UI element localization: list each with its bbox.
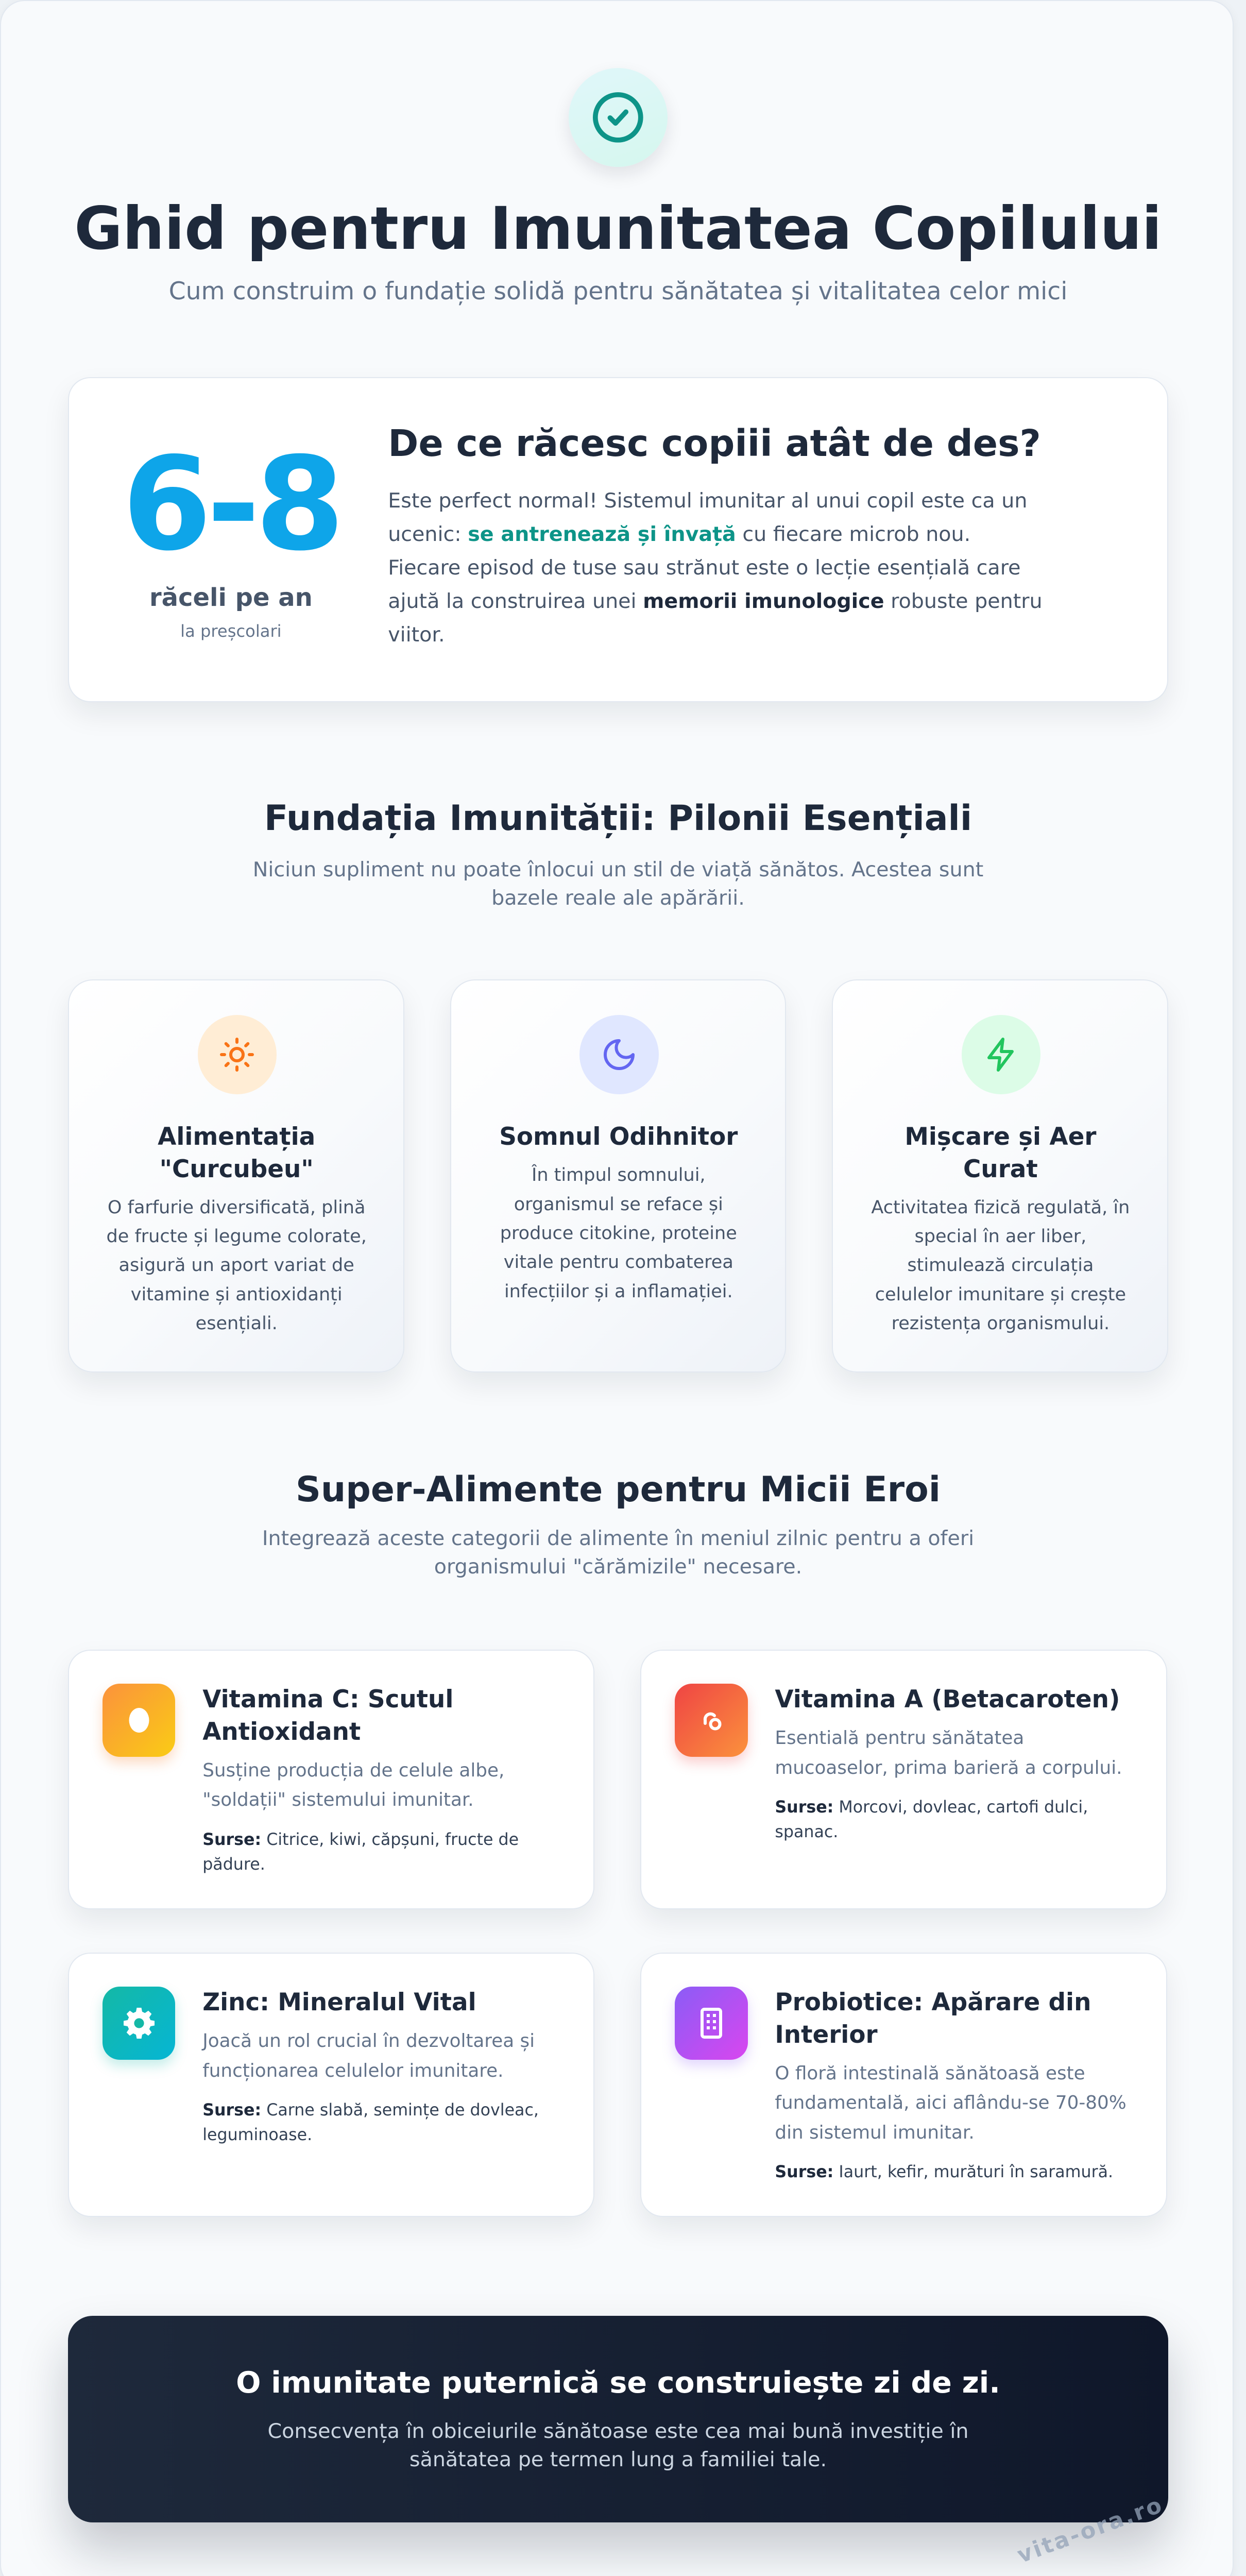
panel: pillar sleep xyxy=(450,979,786,1372)
text: nutrition xyxy=(107,1123,367,1334)
icon: vitamin C xyxy=(103,1684,175,1757)
panel: pillar nutrition xyxy=(68,979,404,1372)
text: vitamin A: Surse: Morcovi, dovleac, cartofi dulci, spanac. xyxy=(775,1798,1088,1841)
text: probiotics xyxy=(775,1989,1126,2181)
text: vitamin C xyxy=(202,1686,519,1874)
text: vitamin A: Esentială pentru sănătatea mucoaselor, prima barieră a corpului. xyxy=(775,1727,1122,1778)
heading: superfoods section: Super-Alimente pentru Micii Eroi xyxy=(296,1469,941,1510)
text: vitamin C: Surse: Citrice, kiwi, căpșuni, fructe de pădure. xyxy=(202,1831,519,1874)
text: nutrition: Alimentația "Curcubeu" xyxy=(158,1123,315,1183)
icon: grid xyxy=(675,1987,748,2060)
text: vitamin C: Susține producția de celule albe, "soldații" sistemului imunitar. xyxy=(202,1760,504,1810)
text: zinc xyxy=(201,1989,539,2144)
watermark: vita-ora.ro xyxy=(1014,2492,1167,2569)
panel: probiotics xyxy=(640,1953,1167,2217)
text: movement: Activitatea fizică regulată, în special în aer liber, stimulează circulația celulelor imunitare și crește rezistența organismului. xyxy=(871,1197,1130,1334)
title: Ghid pentru Imunitatea Copilului xyxy=(74,194,1162,263)
stat: 6-8 colds per year: la preșcolari xyxy=(180,621,282,641)
text block: pillars subtitle: Niciun supliment nu poate înlocui un stil de viață sănătos. Acestea sunt bazele reale ale apărării. xyxy=(253,858,983,910)
icon: header check circle xyxy=(569,68,668,167)
icon: vitamin A xyxy=(675,1684,748,1757)
icon: lightning bolt xyxy=(962,1015,1040,1094)
callout: footer message xyxy=(68,2316,1168,2522)
heading: why children catch colds: De ce răcesc copiii atât de des? xyxy=(388,422,1041,465)
text block: explanation: Este perfect normal! Sistemul imunitar al unui copil este ca un ucenic: se antrenează și învață cu fiecare microb nou. Fiecare episod de tuse sau strănut este o lecție esențială care ajută la construirea unei memorii imunologice robuste pentru viitor. xyxy=(388,489,1043,647)
text block: footer: Consecvența în obiceiurile sănătoase este cea mai bună investiție în sănătatea pe termen lung a familiei tale. xyxy=(268,2419,968,2471)
text: movement: Mișcare și Aer Curat xyxy=(904,1123,1096,1183)
text: sleep: În timpul somnului, organismul se reface și produce citokine, proteine vitale pentru combaterea infecțiilor și a inflamației. xyxy=(500,1164,737,1302)
text: zinc: Zinc: Mineralul Vital xyxy=(202,1989,476,2016)
panel: vitamin A xyxy=(640,1650,1167,1909)
text: probiotics: Surse: Iaurt, kefir, murături în saramură. xyxy=(775,2163,1113,2181)
text: zinc: Surse: Carne slabă, semințe de dovleac, leguminoase. xyxy=(202,2101,539,2144)
text: probiotics: Probiotice: Apărare din Interior xyxy=(775,1989,1091,2049)
heading: footer: O imunitate puternică se construiește zi de zi. xyxy=(236,2366,1000,2400)
icon: sun xyxy=(198,1015,277,1094)
text: movement xyxy=(871,1123,1130,1334)
text: zinc: Joacă un rol crucial în dezvoltarea și funcționarea celulelor imunitare. xyxy=(202,2030,535,2081)
subtitle: Cum construim o fundație solidă pentru sănătatea și vitalitatea celor mici xyxy=(169,277,1067,306)
stat: 6-8 colds per year: 6-8 xyxy=(122,429,339,579)
text: vitamin A: Vitamina A (Betacaroten) xyxy=(775,1686,1120,1714)
panel: vitamin C xyxy=(68,1650,594,1909)
panel: zinc xyxy=(68,1953,594,2217)
text: vitamin C: Vitamina C: Scutul Antioxidant xyxy=(202,1686,453,1746)
panel: pillar movement xyxy=(832,979,1168,1372)
icon: gear xyxy=(103,1987,175,2060)
text: nutrition: O farfurie diversificată, plină de fructe și legume colorate, asigură un aport variat de vitamine și antioxidanți esențiali. xyxy=(107,1197,367,1334)
text: sleep: Somnul Odihnitor xyxy=(499,1123,738,1151)
icon: moon xyxy=(579,1015,659,1094)
stat: 6-8 colds per year: răceli pe an xyxy=(149,583,313,612)
heading: pillars section: Fundația Imunității: Pilonii Esențiali xyxy=(264,798,972,839)
text: vitamin A xyxy=(775,1686,1122,1841)
panel: stat card xyxy=(68,377,1168,702)
text: probiotics: O floră intestinală sănătoasă este fundamentală, aici aflându-se 70-80% din sistemul imunitar. xyxy=(775,2063,1126,2143)
text block: superfoods subtitle: Integrează aceste categorii de alimente în meniul zilnic pentru a oferi organismului "cărămizile" necesare. xyxy=(262,1527,974,1579)
